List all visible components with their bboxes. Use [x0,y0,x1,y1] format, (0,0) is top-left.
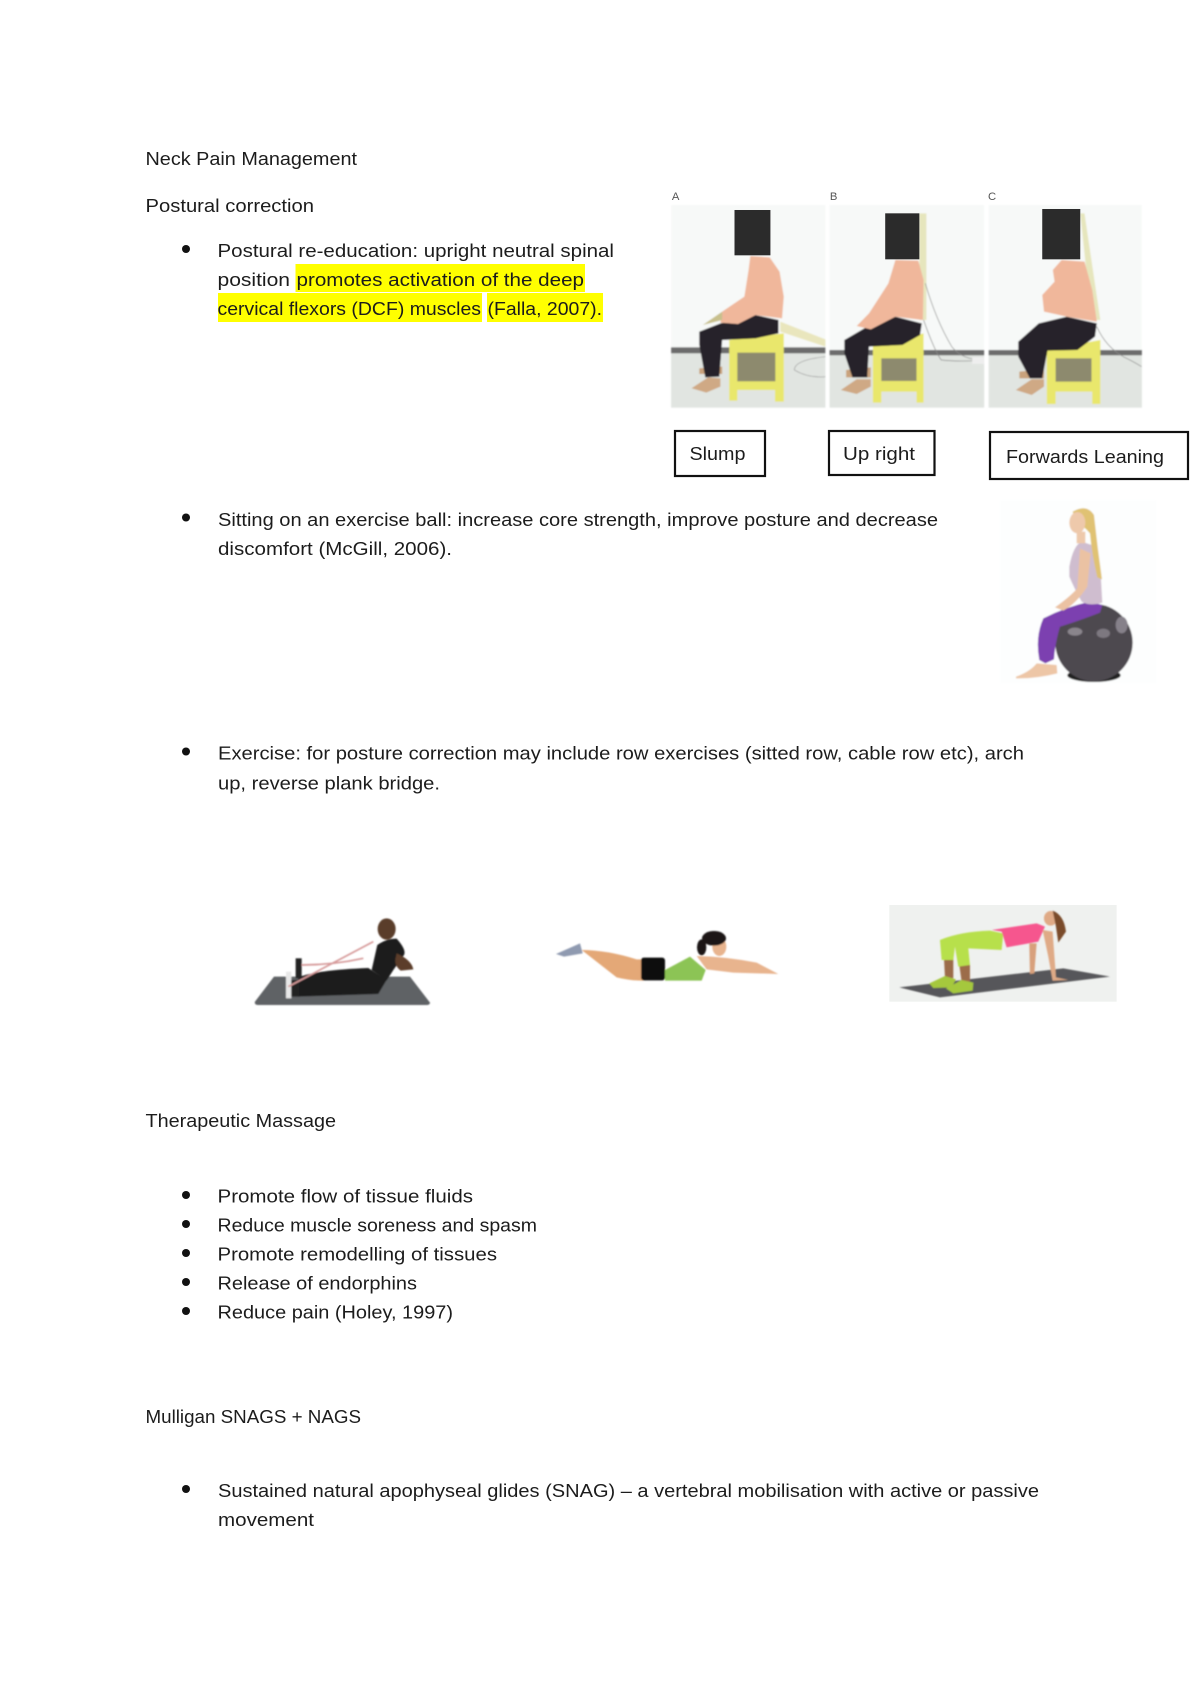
label box: forwards leaning [990,432,1188,479]
bullet text: exercise: up, reverse plank bridge. [218,772,440,794]
photo A: slump [671,191,825,408]
bullet list: massage benefits [182,1186,537,1322]
photo: seated row with band [255,918,430,1005]
heading: postural correction: Postural correction [146,195,314,216]
photo: woman sitting on exercise ball [1000,500,1157,683]
bullet text: exercise ball [182,509,938,559]
label box: forwards leaning: Forwards Leaning [1006,446,1164,467]
bullet text: sustained natural apophyseal glides [182,1480,1039,1530]
bullet text: exercise ball: Sitting on an exercise ball: increase core strength, improve posture and decrease [218,509,938,530]
bullet text: sustained natural apophyseal glides: Sustained natural apophyseal glides (SNAG) – a vertebral mobilisation with active or passive [218,1480,1039,1501]
photo C: forwards leaning: C [988,191,996,203]
bullet text: postural re-education: promotes activation of the deep [296,269,584,290]
bullet text: postural re-education: position [218,269,290,290]
bullet list: massage benefits: Reduce muscle soreness and spasm [218,1214,537,1236]
label box: up right: Up right [843,443,915,464]
bullet text: exercise: Exercise: for posture correction may include row exercises (sitted row, cable row etc), arch [218,742,1024,764]
label box: slump: Slump [690,443,746,464]
label box: slump [675,431,765,476]
bullet list: massage benefits: Promote remodelling of tissues [218,1244,497,1264]
bullet list: massage benefits: Promote flow of tissue fluids [218,1186,473,1206]
bullet text: exercise [182,742,1024,794]
heading: therapeutic massage: Therapeutic Massage [146,1110,336,1131]
bullet text: postural re-education [182,240,614,322]
bullet list: massage benefits: Reduce pain (Holey, 1997) [218,1302,453,1322]
photo C: forwards leaning [988,191,1142,408]
bullet text: postural re-education: Postural re-education: upright neutral spinal [218,240,614,261]
label box: up right [829,431,934,475]
bullet text: postural re-education: (Falla, 2007). [488,298,602,319]
bullet list: massage benefits: Release of endorphins [218,1272,417,1294]
photo B: upright: B [830,191,837,203]
photo A: slump: A [672,191,680,203]
bullet text: postural re-education: cervical flexors (DCF) muscles [218,298,481,319]
bullet text: exercise ball: discomfort (McGill, 2006). [218,538,452,559]
photo: reverse plank bridge [889,905,1117,1002]
photo B: upright [830,191,984,408]
photo panel: sitting postures A B C [671,191,1142,408]
bullet text: sustained natural apophyseal glides: movement [218,1509,314,1530]
title: Neck Pain Management [146,148,357,169]
photo: arch up exercise [556,931,778,981]
heading: mulligan snags + nags: Mulligan SNAGS + NAGS [146,1406,361,1427]
